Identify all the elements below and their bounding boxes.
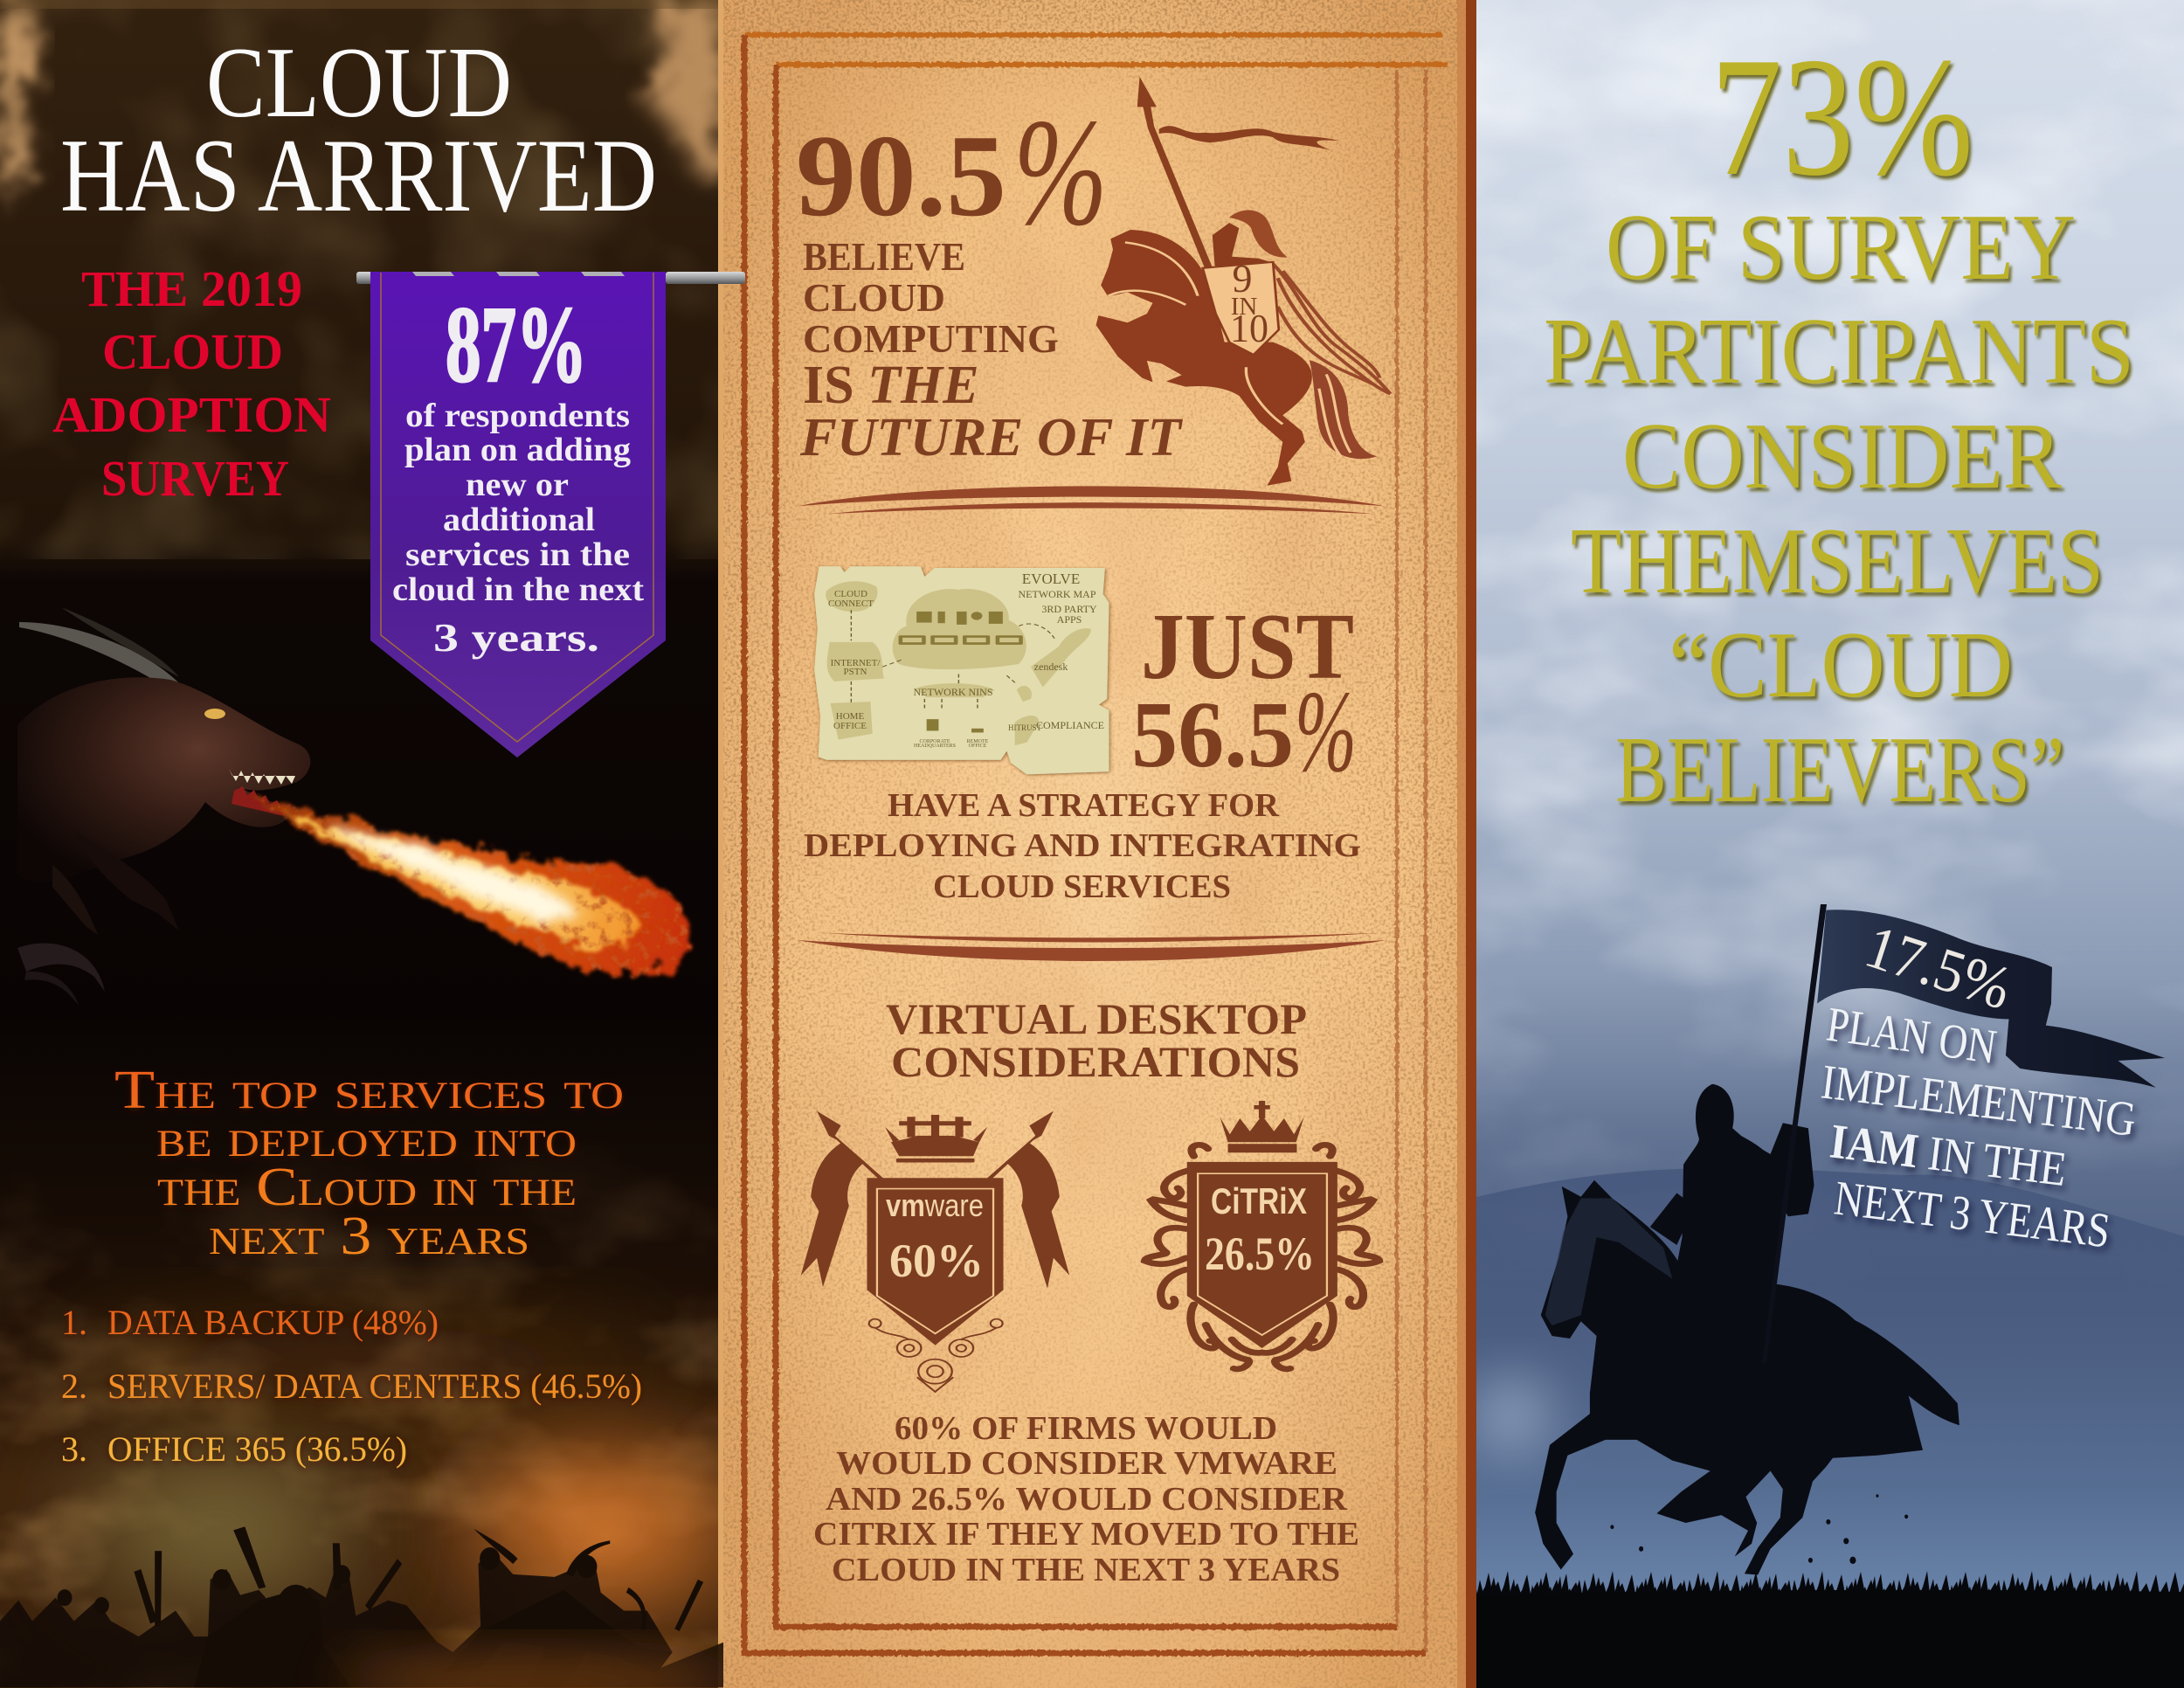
- heading: top services: the Cloud in the: [157, 1158, 577, 1217]
- stat: just 56.5%: JUST: [1141, 595, 1354, 699]
- text: believe cloud computing: BELIEVE: [803, 234, 965, 279]
- map labels: HOME: [836, 711, 864, 722]
- banner: 87%: [356, 272, 666, 758]
- text: of survey participants: THEMSELVES: [1571, 509, 2104, 613]
- banner statistic: 87%: [446, 285, 587, 405]
- subtitle: the 2019 cloud adoption survey: [52, 260, 331, 507]
- parchment frame lines: [744, 35, 1448, 1653]
- banner text: [392, 398, 644, 660]
- map labels: EVOLVE: [1022, 571, 1080, 587]
- icon: citrix shield: [1145, 1101, 1379, 1369]
- text: vdi consideration summary: 60% OF FIRMS WOULD: [895, 1410, 1277, 1447]
- text: vdi consideration summary: AND 26.5% WOULD CONSIDER: [826, 1481, 1348, 1518]
- map labels: CLOUD: [834, 589, 867, 599]
- banner pole over parchment: [666, 272, 745, 284]
- title: cloud has arrived: CLOUD: [206, 27, 512, 139]
- text: of survey participants: [1544, 196, 2134, 822]
- subtitle: the 2019 cloud adoption survey: ADOPTION: [52, 386, 331, 443]
- banner text: services in the: [405, 536, 630, 573]
- banner text: 3 years.: [433, 615, 599, 660]
- list: top three services: OFFICE 365 (36.5%): [107, 1429, 407, 1469]
- text: plan on implementing iam: PLAN ON: [1823, 997, 2000, 1075]
- heading: top services: next 3 years: [209, 1207, 529, 1266]
- heading: virtual desktop considerations: CONSIDERATIONS: [891, 1037, 1300, 1086]
- shield text: 9 in 10: IN: [1231, 293, 1257, 321]
- text: of survey participants: OF SURVEY: [1606, 196, 2076, 300]
- map labels: NETWORK MAP: [1019, 588, 1096, 600]
- list: top three services: SERVERS/ DATA CENTERS (46.5%): [107, 1366, 642, 1406]
- banner text: cloud in the next: [392, 571, 644, 608]
- text: have a strategy: HAVE A STRATEGY FOR: [888, 787, 1280, 824]
- text: vdi consideration summary: WOULD CONSIDER VMWARE: [836, 1445, 1337, 1482]
- map labels: CONNECT: [828, 598, 874, 609]
- map labels: APPS: [1057, 613, 1082, 626]
- map labels: HITRUST: [1008, 723, 1042, 732]
- text: vdi consideration summary: [813, 1410, 1359, 1588]
- vmware logo: vmware: [886, 1187, 984, 1223]
- map labels: REMOTE: [967, 739, 989, 744]
- icon: flag: [1817, 910, 2165, 1088]
- stat: 90.5%: [796, 87, 1108, 258]
- flag statistic: 17.5%: [1857, 913, 2020, 1023]
- ground and grass: [1476, 1569, 2184, 1688]
- network map: [814, 566, 1109, 774]
- text: believe cloud computing: IS THE: [803, 356, 979, 415]
- text: believe cloud computing: [799, 234, 1183, 467]
- divider: [797, 933, 1386, 961]
- list: top three services: 1.: [61, 1303, 87, 1342]
- panel: right sky and knight: [1472, 0, 2184, 1688]
- fire breath: [249, 795, 691, 975]
- panel: left dragon and title: [0, 0, 743, 1688]
- stat: 90.5%: 90.5: [796, 111, 1006, 240]
- stat: just 56.5%: 56.5: [1131, 683, 1294, 787]
- subtitle: the 2019 cloud adoption survey: CLOUD: [102, 323, 283, 380]
- icon: flag pole: [1762, 904, 1827, 1363]
- list: top three services: 3.: [61, 1429, 87, 1469]
- icon: mounted knight silhouette: [1535, 1084, 1959, 1574]
- map labels: OFFICE: [833, 721, 867, 731]
- text: of survey participants: PARTICIPANTS: [1544, 300, 2134, 404]
- divider: [798, 486, 1385, 514]
- banner text: of respondents: [405, 398, 630, 434]
- battle silhouettes: [0, 1526, 724, 1687]
- citrix logo: CiTRiX: [1211, 1180, 1307, 1221]
- shield text: 9 in 10: 9: [1232, 256, 1253, 301]
- citrix 26.5%: 26.5%: [1205, 1228, 1315, 1280]
- text: plan on implementing iam: [1818, 997, 2139, 1259]
- text: of survey participants: BELIEVERS”: [1615, 718, 2064, 822]
- text: vdi consideration summary: CLOUD IN THE NEXT 3 YEARS: [832, 1552, 1340, 1588]
- title: cloud has arrived: HAS ARRIVED: [60, 117, 657, 233]
- map labels: CORPORATE: [919, 739, 950, 744]
- subtitle: the 2019 cloud adoption survey: SURVEY: [101, 450, 289, 507]
- dragon: [17, 607, 310, 1005]
- text: believe cloud computing: CLOUD: [803, 275, 945, 320]
- list: top three services: [61, 1303, 642, 1469]
- stat: 73%: 73%: [1711, 23, 1973, 211]
- title: cloud has arrived: [63, 49, 653, 212]
- text: vdi consideration summary: CITRIX IF THEY MOVED TO THE: [813, 1516, 1359, 1553]
- heading: top services: The top services to: [114, 1061, 624, 1120]
- stat: 90.5%: %: [1013, 87, 1108, 258]
- heading: virtual desktop considerations: VIRTUAL DESKTOP: [886, 994, 1307, 1043]
- text: have a strategy: [804, 787, 1361, 905]
- heading: virtual desktop considerations: [886, 994, 1307, 1086]
- shield text: 9 in 10: [1230, 256, 1268, 350]
- text: of survey participants: CONSIDER: [1622, 405, 2062, 508]
- vmware 60%: 60%: [889, 1235, 984, 1287]
- banner text: new or: [466, 467, 569, 503]
- banner text: additional: [443, 502, 595, 538]
- map labels: OFFICE: [969, 744, 987, 749]
- map labels: NETWORK NINS: [914, 686, 992, 698]
- map labels: INTERNET/: [831, 658, 881, 668]
- map labels: PSTN: [844, 667, 867, 677]
- stat: just 56.5%: %: [1295, 667, 1357, 796]
- subtitle: the 2019 cloud adoption survey: THE 2019: [81, 260, 302, 317]
- text: of survey participants: “CLOUD: [1669, 613, 2013, 717]
- map labels: [828, 571, 1104, 749]
- heading: top services: be deployed into: [156, 1109, 577, 1168]
- map labels: zendesk: [1034, 661, 1068, 673]
- heading: top services: [114, 1071, 624, 1255]
- icon: vmware shield: [801, 1111, 1069, 1392]
- panel: centre parchment: [723, 0, 1476, 1688]
- map labels: HEADQUARTERS: [914, 744, 956, 749]
- map labels: COMPLIANCE: [1036, 719, 1104, 731]
- map labels: 3RD PARTY: [1041, 603, 1097, 615]
- text: have a strategy: CLOUD SERVICES: [933, 868, 1231, 905]
- text: plan on implementing iam: IMPLEMENTING: [1818, 1055, 2139, 1147]
- list: top three services: DATA BACKUP (48%): [107, 1303, 439, 1342]
- text: have a strategy: DEPLOYING AND INTEGRATING: [804, 827, 1361, 864]
- icon: knight on rearing horse: [1096, 77, 1390, 486]
- banner text: plan on adding: [404, 432, 631, 468]
- text: believe cloud computing: FUTURE OF IT: [799, 408, 1183, 467]
- text: believe cloud computing: COMPUTING: [803, 316, 1059, 361]
- text: plan on implementing iam: IAM IN THE: [1827, 1114, 2070, 1197]
- list: top three services: 2.: [61, 1366, 87, 1406]
- shield text: 9 in 10: 10: [1230, 306, 1268, 350]
- text: plan on implementing iam: NEXT 3 YEARS: [1831, 1171, 2113, 1259]
- stat: just 56.5%: [1131, 595, 1357, 796]
